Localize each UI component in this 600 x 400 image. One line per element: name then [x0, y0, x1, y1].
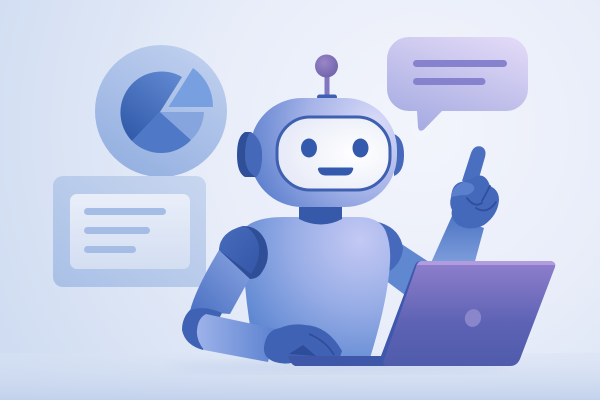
robot antenna [315, 54, 338, 100]
laptop logo [462, 307, 484, 329]
robot torso [245, 217, 390, 358]
robot right shoulder [378, 222, 403, 271]
robot left arm [182, 226, 276, 362]
pie chart [120, 68, 213, 153]
robot pointing hand [450, 146, 499, 228]
bubble text lines [413, 60, 507, 85]
elbow joint [182, 308, 222, 350]
robot head [237, 98, 397, 207]
face plate [277, 117, 390, 190]
laptop screen [383, 261, 555, 366]
laptop base [288, 356, 390, 366]
eyes [301, 138, 368, 158]
laptop screen edge [381, 261, 425, 366]
left ear [237, 132, 262, 177]
text lines [84, 208, 166, 253]
robot left hand [264, 324, 342, 364]
shoulder joint [219, 226, 268, 279]
mouth [318, 168, 353, 176]
speech bubble [387, 37, 528, 131]
upper arm [190, 250, 252, 314]
laptop [288, 261, 556, 366]
table surface [0, 353, 600, 400]
panel: pie chart badge [95, 45, 227, 177]
robot right ear [394, 134, 404, 176]
robot neck [299, 207, 342, 224]
robot right arm [385, 216, 484, 295]
table shadow [170, 363, 510, 371]
forearm [197, 314, 276, 362]
panel: text card [53, 176, 206, 287]
